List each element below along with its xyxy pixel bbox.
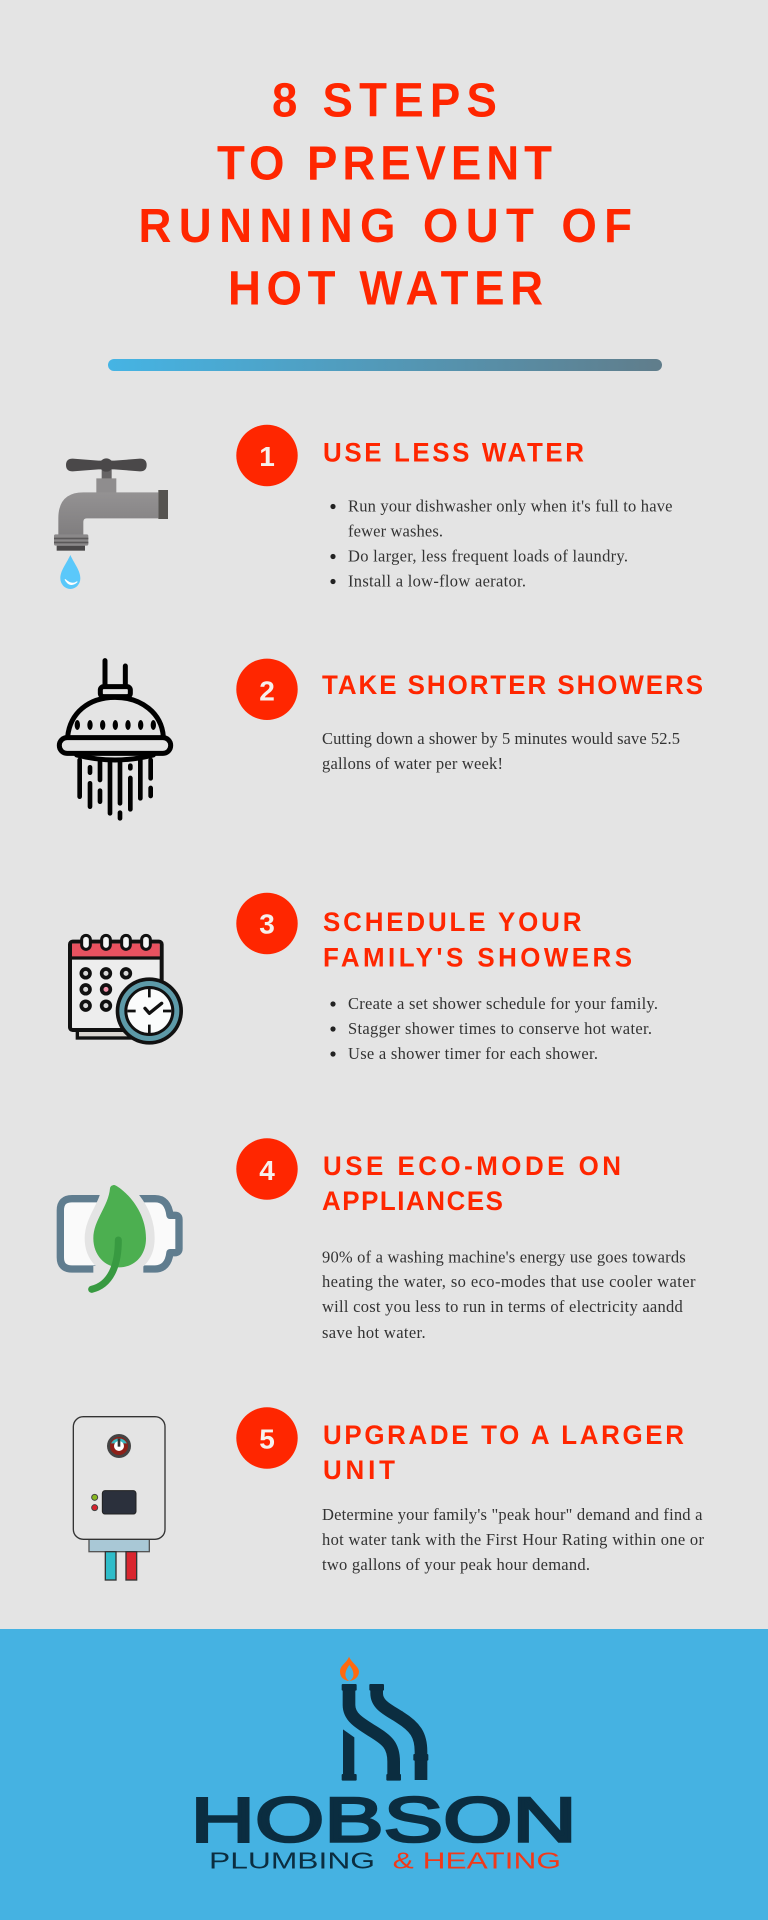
heading: TAKE SHORTER SHOWERS: [322, 670, 703, 700]
bullet list: Create a set shower schedule for your family.: [348, 994, 658, 1013]
bullet list: [330, 497, 672, 591]
logo wordmark: [191, 1785, 577, 1874]
logo wordmark: PLUMBING: [209, 1848, 375, 1874]
logo wordmark: HOBSON: [191, 1785, 577, 1855]
panel: step 5 upgrade to a larger unit: [73, 1407, 704, 1580]
body text: hot water tank with the First Hour Rating within one or: [322, 1530, 704, 1549]
step number 2: [236, 659, 298, 720]
panel: step 4 use eco-mode on appliances: [60, 1138, 696, 1342]
step number 1: 1: [259, 441, 275, 472]
body text: 90% of a washing machine's energy use goes towards: [322, 1247, 686, 1266]
body text: Determine your family's "peak hour" demand and find a: [322, 1505, 703, 1524]
heading: [322, 1151, 621, 1216]
step number 4: [236, 1138, 298, 1200]
icon: faucet with water drop: [54, 458, 168, 589]
heading: APPLIANCES: [322, 1186, 503, 1216]
logo wordmark: & HEATING: [393, 1848, 561, 1874]
title: [138, 74, 632, 315]
panel: step 2 take shorter showers: [59, 659, 703, 818]
heading: [323, 907, 632, 973]
bullet list: fewer washes.: [348, 522, 443, 541]
step number 2: 2: [259, 676, 275, 706]
heading: FAMILY'S SHOWERS: [323, 942, 632, 973]
title: RUNNING OUT OF: [138, 199, 632, 252]
step number 5: [236, 1407, 298, 1469]
bullet list: Run your dishwasher only when it's full to have: [348, 497, 672, 516]
bullet list: Stagger shower times to conserve hot water.: [348, 1019, 652, 1038]
icon: calendar with clock: [70, 935, 183, 1045]
title: TO PREVENT: [217, 136, 552, 190]
body text: gallons of water per week!: [322, 754, 503, 773]
bullet list: [330, 994, 658, 1063]
body text: will cost you less to run in terms of electricity aandd: [322, 1297, 684, 1316]
bullet list: Use a shower timer for each shower.: [348, 1044, 598, 1063]
title: HOT WATER: [228, 261, 543, 315]
heading: SCHEDULE YOUR: [323, 907, 581, 937]
heading: USE LESS WATER: [323, 437, 584, 468]
body text: [322, 729, 680, 773]
body text: [322, 1505, 704, 1574]
heading: UPGRADE TO A LARGER: [323, 1420, 684, 1450]
step number 3: 3: [259, 908, 275, 940]
bullet list: Do larger, less frequent loads of laundry.: [348, 547, 628, 566]
body text: heating the water, so eco-modes that use cooler water: [322, 1272, 696, 1291]
heading: UNIT: [323, 1455, 395, 1485]
title: 8 STEPS: [272, 74, 497, 127]
panel: footer logo band: [0, 1629, 768, 1920]
panel: step 1 use less water: [54, 425, 673, 591]
icon: battery with leaf: [60, 1185, 179, 1289]
body text: Cutting down a shower by 5 minutes would save 52.5: [322, 729, 680, 748]
panel: step 3 schedule your family's showers: [70, 893, 658, 1063]
step number 3: [236, 893, 298, 954]
step number 5: 5: [259, 1424, 275, 1454]
bullet list: Install a low-flow aerator.: [348, 572, 526, 591]
icon: pipes and flame logo: [340, 1657, 428, 1781]
body text: [322, 1247, 696, 1342]
step number 4: 4: [259, 1155, 275, 1186]
icon: shower head: [59, 661, 171, 818]
icon: water heater: [73, 1417, 165, 1580]
divider bar: [108, 359, 662, 371]
body text: two gallons of your peak hour demand.: [322, 1555, 590, 1574]
heading: [323, 1420, 684, 1485]
body text: save hot water.: [322, 1323, 426, 1342]
step number 1: [236, 425, 298, 486]
heading: USE ECO-MODE ON: [323, 1151, 621, 1181]
